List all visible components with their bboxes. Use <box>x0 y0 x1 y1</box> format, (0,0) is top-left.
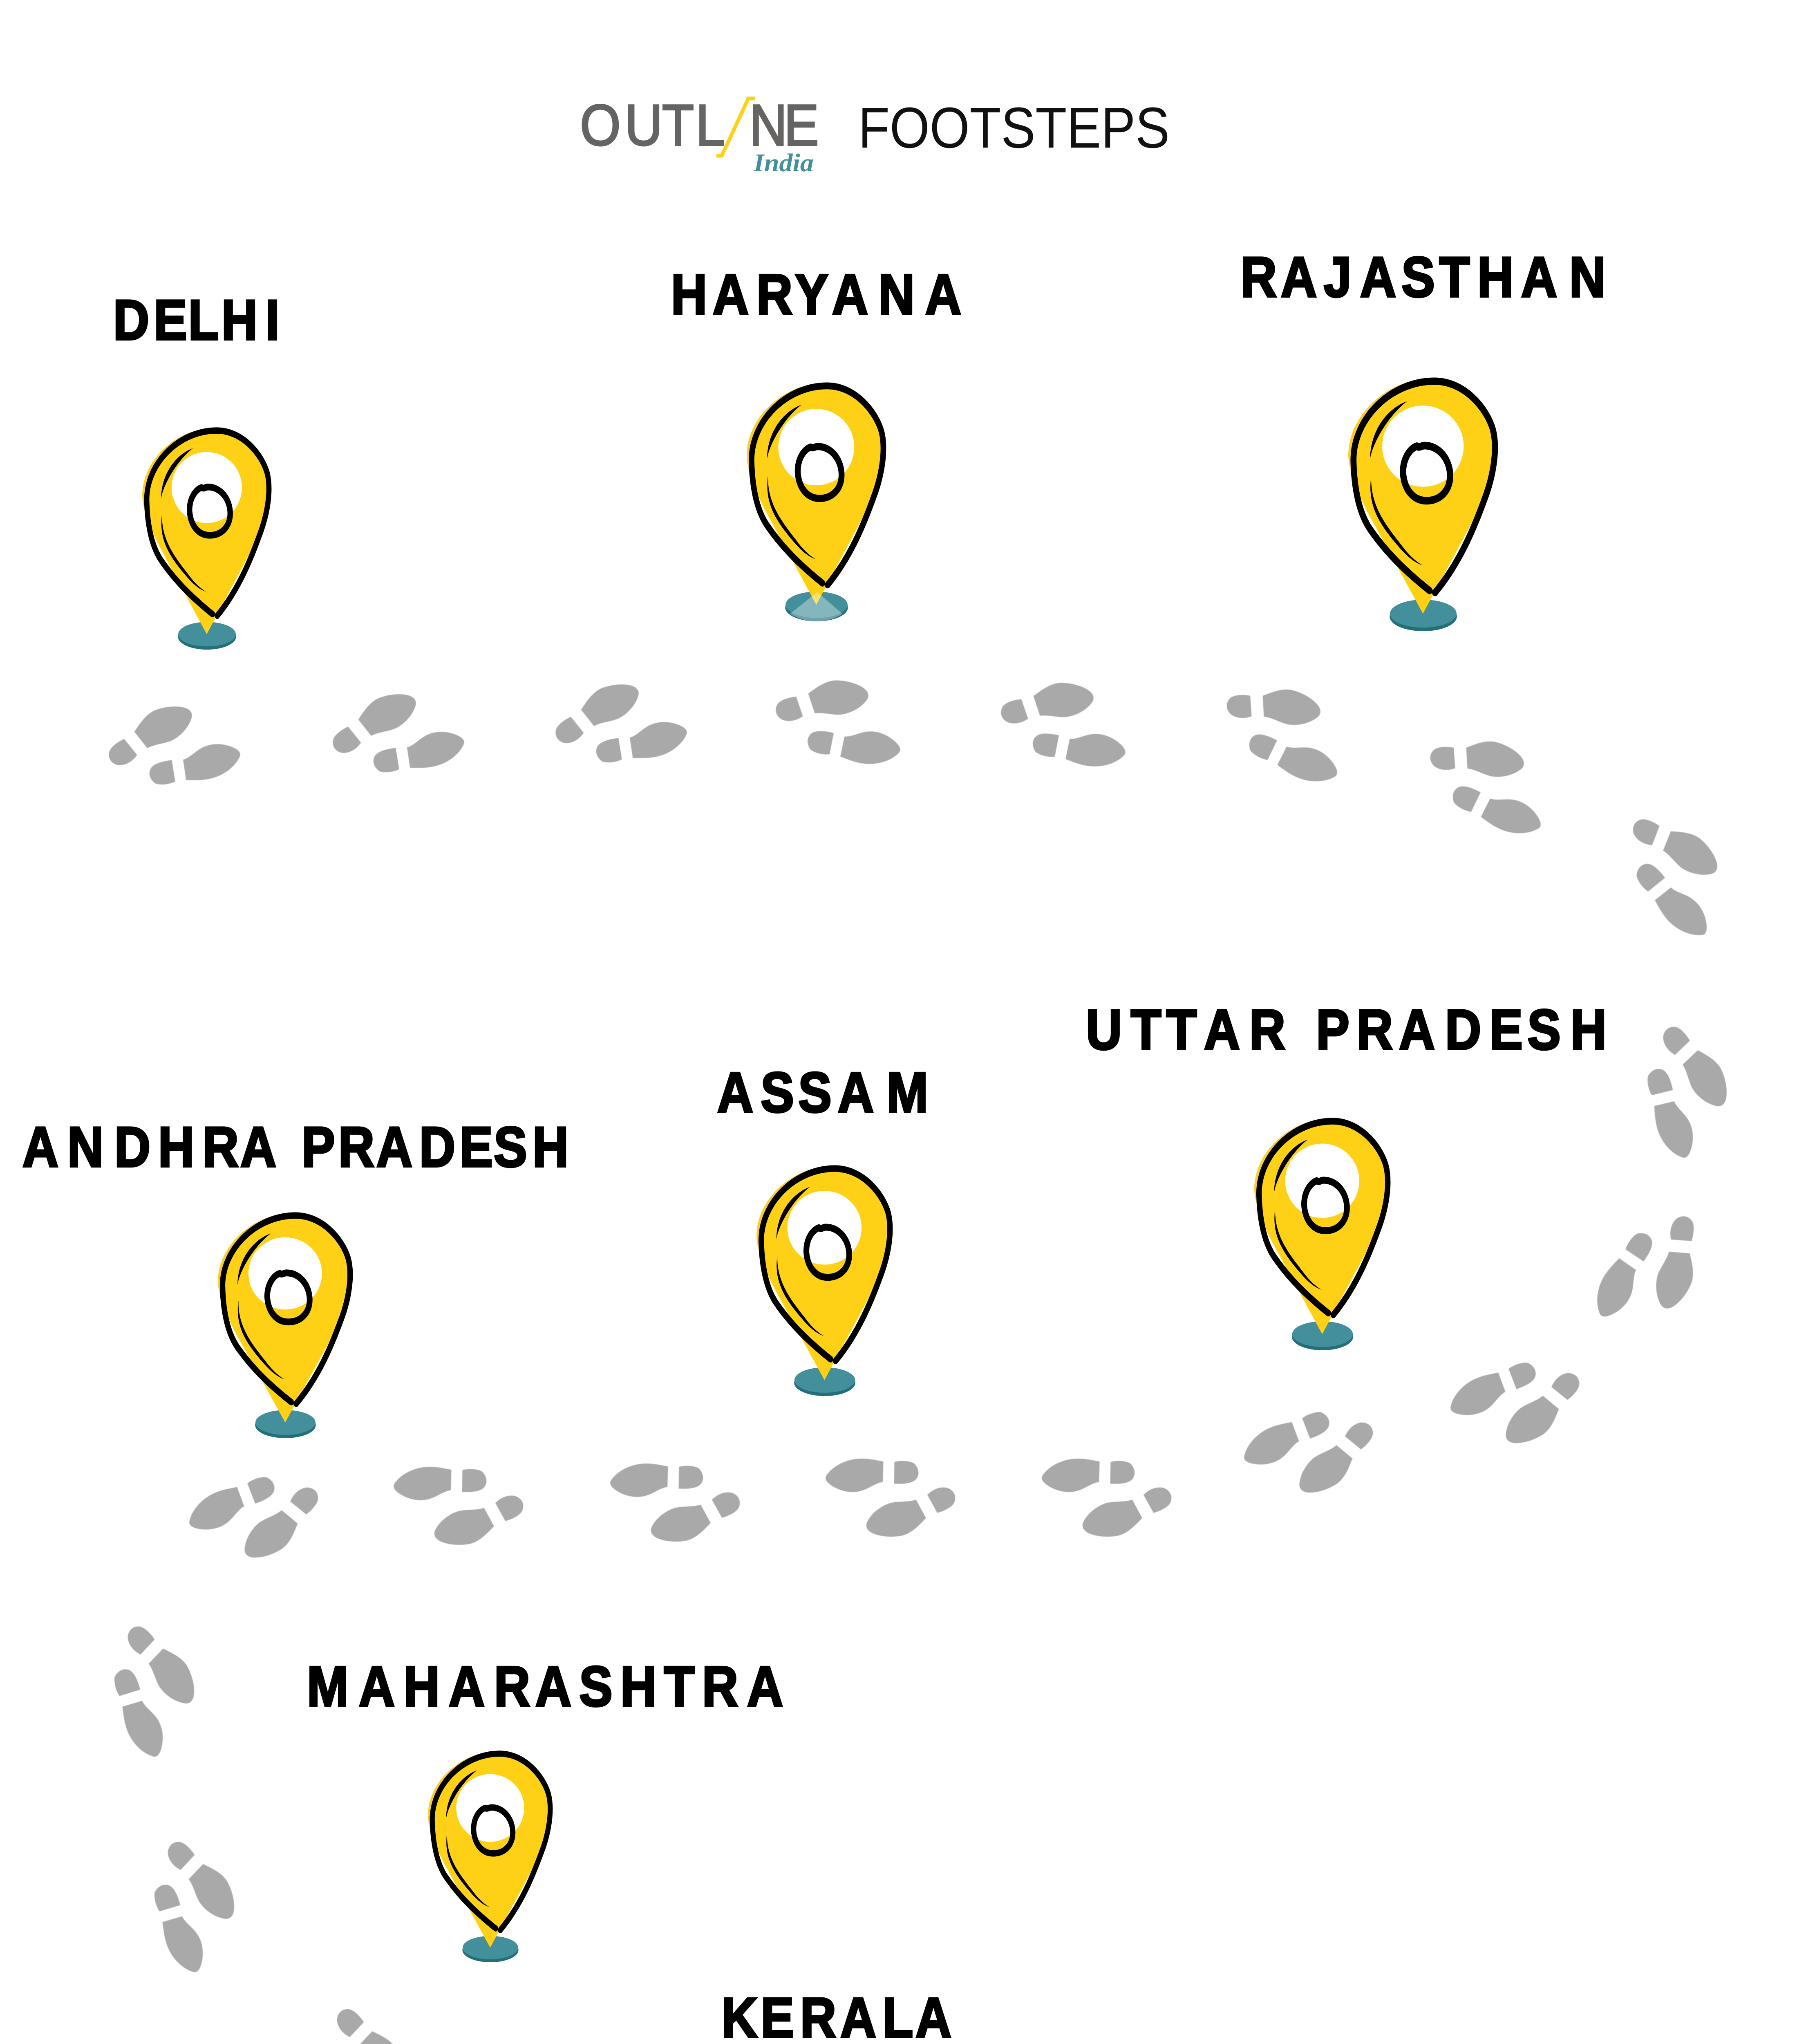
logo: Outline India: OUTL <box>580 93 725 157</box>
footprint 12 <box>1238 1402 1383 1505</box>
footprint 1 <box>109 706 240 784</box>
footprint 16 <box>385 1456 528 1555</box>
icon: Andhra Pradesh map pin <box>218 1214 350 1438</box>
label: Assam: ASSAM <box>717 1060 928 1124</box>
title: Footsteps: FOOTSTEPS <box>858 95 1170 160</box>
label: Haryana: HARYANA <box>671 262 961 326</box>
icon: Haryana map pin <box>747 384 883 621</box>
footprint 8 <box>1612 796 1746 949</box>
footprint 4 <box>766 661 916 779</box>
footprints trail <box>107 661 1746 2044</box>
icon: Uttar Pradesh map pin <box>1254 1119 1388 1350</box>
label: Delhi: DELHI <box>113 288 280 352</box>
logo: Outline India: India <box>753 149 814 177</box>
label: Uttar Pradesh: UTTAR PRADESH <box>1086 997 1607 1061</box>
footprint 6 <box>1211 661 1364 800</box>
label: Maharashtra: MAHARASHTRA <box>307 1654 783 1718</box>
footprint 2 <box>333 694 464 772</box>
footprint 20 <box>316 2002 412 2044</box>
footprint 19 <box>147 1835 243 1976</box>
footprint 3 <box>555 684 687 762</box>
footprint 7 <box>1415 713 1567 852</box>
icon: Assam map pin <box>756 1167 890 1396</box>
footprint 5 <box>991 663 1141 782</box>
icon: Maharashtra map pin <box>428 1752 550 1962</box>
footprint 17 <box>183 1467 328 1570</box>
footprint 18 <box>107 1620 203 1761</box>
logo: Outline India <box>580 93 819 177</box>
footprint 13 <box>1034 1448 1177 1547</box>
footprint 15 <box>602 1452 745 1552</box>
icon: Rajasthan map pin <box>1348 379 1495 631</box>
footprint 9 <box>1643 1023 1732 1160</box>
label: Rajasthan: RAJASTHAN <box>1241 245 1605 309</box>
label: Andhra Pradesh: ANDHRA PRADESH <box>22 1115 568 1179</box>
footprint 10 <box>1579 1199 1725 1348</box>
icon: Delhi map pin <box>142 429 269 650</box>
logo: Outline India: NE <box>750 93 819 157</box>
footprint 14 <box>817 1448 960 1547</box>
footprint 11 <box>1444 1352 1589 1456</box>
